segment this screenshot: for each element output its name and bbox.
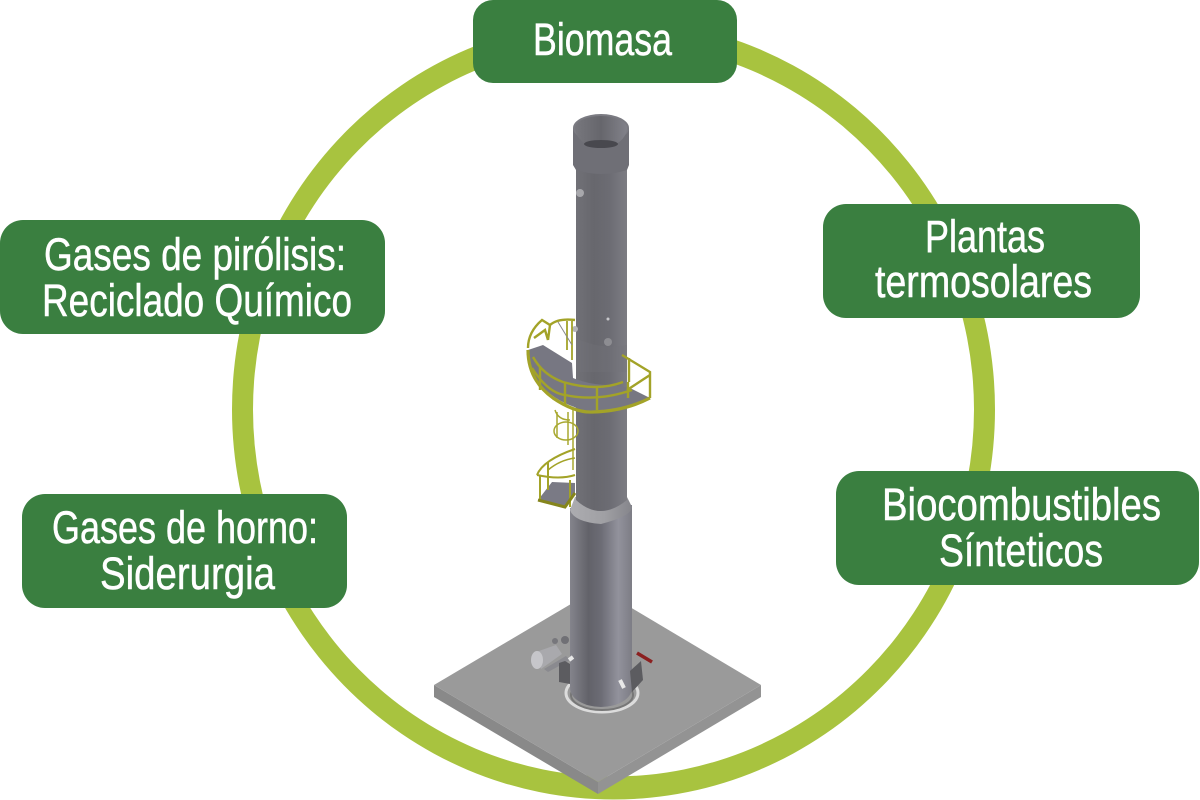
label: Gases de pirólisis: Gases de pirólisis:	[44, 229, 346, 280]
ring	[232, 20, 995, 800]
label: Biocombustibles Sínteticos	[836, 471, 1199, 585]
upper platform	[528, 320, 650, 412]
label: Gases de horno	[22, 494, 347, 608]
platform floor	[528, 345, 650, 412]
flange	[570, 497, 632, 524]
lower pipe	[570, 505, 632, 707]
base ring	[566, 674, 638, 712]
lower platform	[537, 449, 575, 507]
label: Gases de pirólisis: Reciclado Químico	[42, 275, 352, 326]
red valve	[637, 653, 652, 662]
label: Plantas termosolares: termosolares	[875, 256, 1092, 307]
label: Biomasa	[473, 0, 737, 83]
label: Biocombustibles Sínteticos: Biocombustibles	[882, 479, 1161, 530]
side vessel	[531, 636, 570, 672]
ladder cage	[554, 410, 578, 470]
left support bracket	[559, 661, 570, 684]
upper pipe	[576, 160, 627, 511]
top opening	[573, 114, 629, 142]
inner opening	[584, 140, 618, 148]
label: Biocombustibles Sínteticos: Sínteticos	[939, 525, 1103, 576]
top collar	[573, 128, 629, 174]
tower illustration	[434, 114, 761, 794]
label: Gases de horno: Siderurgia	[100, 548, 276, 599]
opening interior	[575, 116, 627, 147]
label: Plantas termosolares: Plantas	[925, 211, 1045, 262]
label: Biomasa: Biomasa	[533, 14, 673, 65]
label: Gases de horno: Gases de horno:	[52, 502, 318, 553]
base slab	[434, 588, 761, 794]
label: Gases de pirólisis	[0, 220, 385, 334]
railings	[528, 320, 650, 412]
pipe upper band	[576, 338, 627, 372]
right support bracket	[630, 661, 643, 692]
label: Plantas termosolares	[823, 204, 1140, 318]
white fitting	[569, 657, 624, 688]
pipe nozzles	[572, 189, 612, 346]
